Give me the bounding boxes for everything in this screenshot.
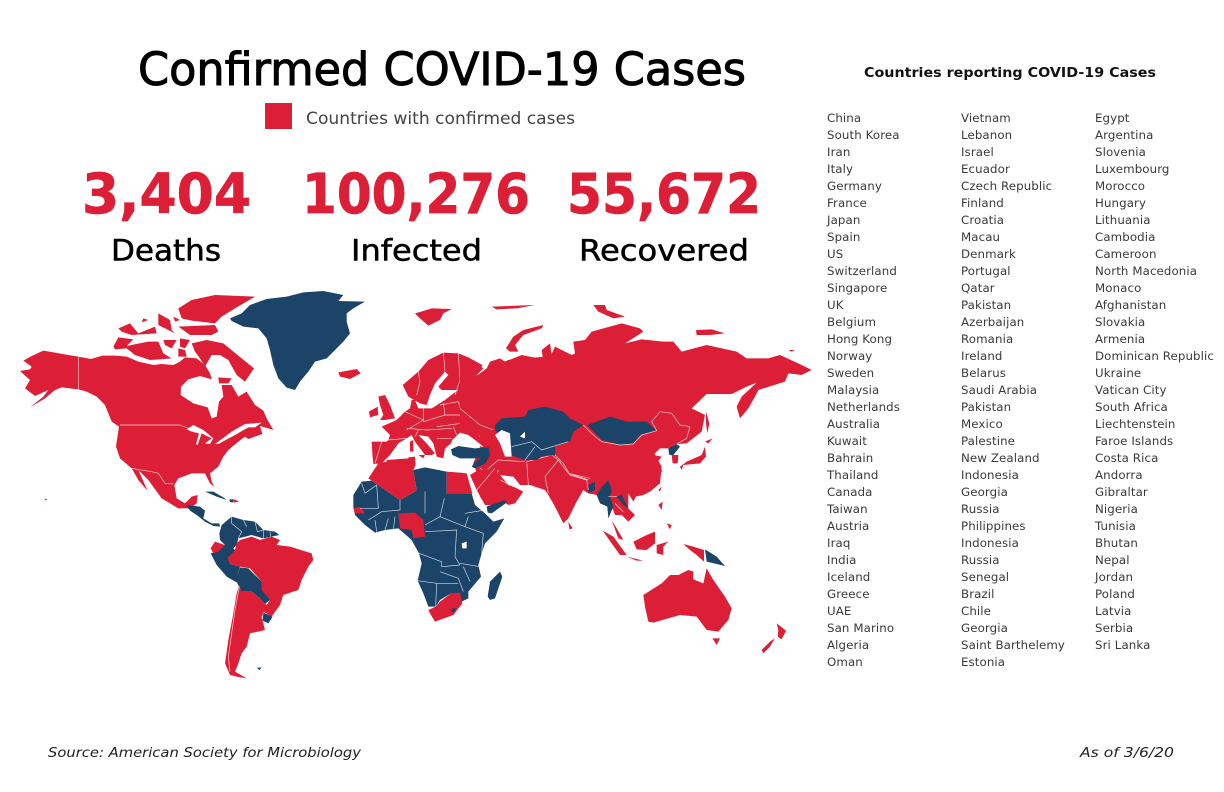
country list column 3: Ukraine: [1095, 366, 1141, 380]
country list column 3: Faroe Islands: [1095, 434, 1173, 448]
country list column 3: Liechtenstein: [1095, 417, 1176, 431]
country list column 1: Iraq: [827, 536, 850, 550]
country list column 2: Russia: [961, 553, 1000, 567]
country list column 1: Japan: [826, 213, 860, 227]
Russia and northern Asia: [460, 305, 812, 477]
country list column 3: Latvia: [1095, 604, 1132, 618]
country list column 3: Nepal: [1095, 553, 1130, 567]
country list column 3: Nigeria: [1095, 502, 1138, 516]
country list column 2: Indonesia: [961, 468, 1019, 482]
country list column 2: Georgia: [961, 485, 1008, 499]
country list column 1: San Marino: [827, 621, 894, 635]
country list column 2: Senegal: [961, 570, 1009, 584]
country list column 3: North Macedonia: [1095, 264, 1197, 278]
country list column 1: Greece: [827, 587, 870, 601]
country list column 3: Slovakia: [1095, 315, 1145, 329]
country list column 1: Kuwait: [827, 434, 867, 448]
country list column 2: Ireland: [961, 349, 1002, 363]
country list column 3: Cambodia: [1095, 230, 1155, 244]
Greenland and Iceland: [230, 291, 365, 390]
country list column 3: Gibraltar: [1095, 485, 1148, 499]
country list column 1: Taiwan: [826, 502, 868, 516]
stat: recovered: 55,672: [567, 162, 761, 226]
country list column 1: Germany: [827, 179, 882, 193]
stat: deaths: Deaths: [111, 234, 221, 268]
country list column 2: Philippines: [961, 519, 1026, 533]
country list column 1: Thailand: [826, 468, 878, 482]
country list column 3: Morocco: [1095, 179, 1145, 193]
date note: As of 3/6/20: [1079, 745, 1174, 761]
country list column 3: Hungary: [1095, 196, 1146, 210]
country list column 2: Croatia: [961, 213, 1004, 227]
country list column 3: Andorra: [1095, 468, 1143, 482]
country list column 1: Sweden: [827, 366, 874, 380]
country list column 2: Finland: [961, 196, 1004, 210]
country list column 1: US: [827, 247, 843, 261]
country list column 2: Indonesia: [961, 536, 1019, 550]
country list column 3: Monaco: [1095, 281, 1141, 295]
country list column 1: Switzerland: [827, 264, 897, 278]
country list column 3: Lithuania: [1095, 213, 1151, 227]
Turkey and Syria: [451, 446, 490, 468]
country list column 1: Bahrain: [827, 451, 873, 465]
world map: [20, 291, 812, 678]
country list column 1: Oman: [827, 655, 863, 669]
country list column 2: Azerbaijan: [961, 315, 1024, 329]
Africa and Arabia: [353, 457, 512, 622]
country list column 1: Norway: [827, 349, 872, 363]
country list column 2: Belarus: [961, 366, 1006, 380]
country list column 1: France: [827, 196, 867, 210]
country list column 1: Malaysia: [827, 383, 879, 397]
country list column 1: Singapore: [827, 281, 887, 295]
stat: infected: Infected: [351, 234, 482, 268]
country list column 2: Saint Barthelemy: [961, 638, 1065, 652]
country list column 3: Slovenia: [1095, 145, 1146, 159]
country list column 3: Luxembourg: [1095, 162, 1170, 176]
country list column 3: Tunisia: [1094, 519, 1136, 533]
country list column 3: Armenia: [1095, 332, 1145, 346]
list heading: Countries reporting COVID-19 Cases: [864, 65, 1156, 81]
South Asia and Oceania: [480, 440, 786, 653]
country list column 2: Israel: [961, 145, 994, 159]
country list column 2: Georgia: [961, 621, 1008, 635]
country list column 3: Egypt: [1095, 111, 1130, 125]
Black Sea: [452, 433, 483, 447]
country list column 1: Iceland: [827, 570, 870, 584]
country list column 3: South Africa: [1095, 400, 1168, 414]
stat: infected: 100,276: [302, 162, 530, 226]
country list column 1: UK: [827, 298, 844, 312]
country list column 1: China: [827, 111, 861, 125]
country list column 1: Australia: [827, 417, 880, 431]
country list column 1: Netherlands: [827, 400, 900, 414]
country list column 1: Canada: [827, 485, 872, 499]
country list column 3: Dominican Republic: [1095, 349, 1214, 363]
country list column 3: Jordan: [1094, 570, 1133, 584]
stat: deaths: 3,404: [82, 162, 251, 226]
country list column 2: Russia: [961, 502, 1000, 516]
country list column 1: Belgium: [827, 315, 876, 329]
country list column 3: Sri Lanka: [1095, 638, 1150, 652]
country list column 3: Bhutan: [1095, 536, 1138, 550]
legend: [265, 103, 575, 129]
Central Asia, Mongolia and Korea: [460, 407, 690, 490]
country list column 2: Portugal: [961, 264, 1011, 278]
country list column 2: Qatar: [961, 281, 995, 295]
country list column 2: Mexico: [961, 417, 1003, 431]
country list column 3: Serbia: [1095, 621, 1133, 635]
stat: recovered: [567, 162, 761, 268]
stat: infected: [302, 162, 530, 268]
stat: recovered: Recovered: [579, 234, 749, 268]
country list column 1: Italy: [827, 162, 853, 176]
title: Confirmed COVID-19 Cases: [138, 43, 746, 96]
country list column 1: Hong Kong: [827, 332, 892, 346]
country list column 2: Lebanon: [961, 128, 1012, 142]
country list column 2: Ecuador: [961, 162, 1010, 176]
country list column 1: Algeria: [827, 638, 869, 652]
country list column 1: South Korea: [827, 128, 900, 142]
country list column 1: India: [827, 553, 856, 567]
country list column 2: New Zealand: [961, 451, 1040, 465]
country list column 1: UAE: [827, 604, 851, 618]
country list column 2: Pakistan: [961, 400, 1011, 414]
source note: Source: American Society for Microbiology: [48, 745, 362, 761]
country list column 2: Brazil: [961, 587, 995, 601]
stat: deaths: [82, 162, 251, 268]
country list column 2: Vietnam: [961, 111, 1011, 125]
country list column 3: Argentina: [1095, 128, 1153, 142]
legend: Countries with confirmed cases: [306, 109, 575, 128]
country list column 3: Afghanistan: [1095, 298, 1166, 312]
Svalbard: [415, 308, 452, 326]
country list column 2: Estonia: [961, 655, 1005, 669]
country list column 3: Cameroon: [1095, 247, 1157, 261]
country list column 2: Palestine: [961, 434, 1015, 448]
country list column 2: Pakistan: [961, 298, 1011, 312]
Europe: [369, 353, 545, 464]
country list column 2: Macau: [961, 230, 1000, 244]
country list column 2: Czech Republic: [961, 179, 1052, 193]
country list column 1: Iran: [827, 145, 850, 159]
country list column 1: Spain: [827, 230, 860, 244]
country list column 3: Poland: [1095, 587, 1135, 601]
country list column 2: Denmark: [961, 247, 1016, 261]
country list column 3: Vatican City: [1095, 383, 1167, 397]
North America: [20, 295, 273, 508]
country list column 3: Costa Rica: [1095, 451, 1158, 465]
country list column 2: Chile: [961, 604, 991, 618]
Central and South America: [186, 492, 313, 678]
country list column 1: Austria: [827, 519, 869, 533]
country list column 2: Saudi Arabia: [961, 383, 1037, 397]
country list column 2: Romania: [961, 332, 1013, 346]
